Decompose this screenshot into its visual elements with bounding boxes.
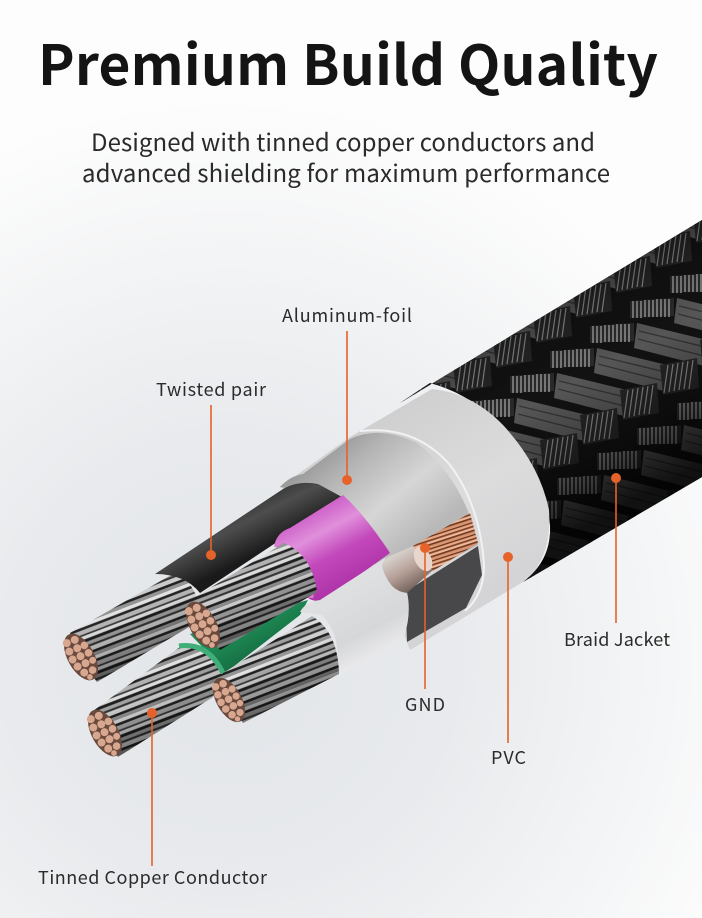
aluminum foil shield: [280, 433, 478, 590]
wire B conductor end: [179, 596, 227, 654]
subtitle: advanced shielding for maximum performance: [82, 154, 610, 189]
label: Aluminum-foil: Aluminum-foil: [282, 302, 412, 328]
green sleeve: [190, 600, 308, 674]
subtitle: Designed with tinned copper conductors and: [91, 123, 595, 158]
PVC outer sheath: [280, 389, 549, 650]
label: GND: GND: [405, 691, 445, 717]
wire C strands: [81, 646, 223, 762]
label: Aluminum-foil: [282, 302, 412, 485]
green collar: [179, 646, 223, 673]
label: Twisted pair: [156, 376, 267, 560]
label: GND: [405, 543, 445, 717]
wire B strands: [179, 543, 317, 654]
white sleeve: [300, 558, 409, 679]
label: Tinned Copper Conductor: Tinned Copper Conductor: [38, 864, 268, 890]
braid jacket: [400, 220, 702, 582]
wire A strands: [70, 571, 204, 682]
wire A conductor end: [57, 628, 105, 686]
label: PVC: PVC: [491, 744, 526, 770]
subtitle: [82, 123, 610, 189]
label: Braid Jacket: Braid Jacket: [564, 626, 670, 652]
cable illustration: [62, 220, 702, 757]
wire D conductor end: [206, 673, 252, 727]
inner cavity: [405, 546, 482, 642]
black sleeve: [155, 483, 342, 593]
twisted pair: wire A and black sleeve: [57, 483, 342, 686]
GND drain wire: [382, 513, 478, 593]
label: Braid Jacket: [564, 473, 670, 652]
label: Twisted pair: Twisted pair: [156, 376, 267, 402]
wire C conductor end: [81, 704, 129, 762]
wire D strands: [206, 616, 339, 727]
magenta sleeve: [275, 495, 390, 601]
label: Tinned Copper Conductor: [38, 708, 268, 890]
label: PVC: [491, 552, 526, 770]
title: Premium Build Quality: [38, 21, 658, 101]
